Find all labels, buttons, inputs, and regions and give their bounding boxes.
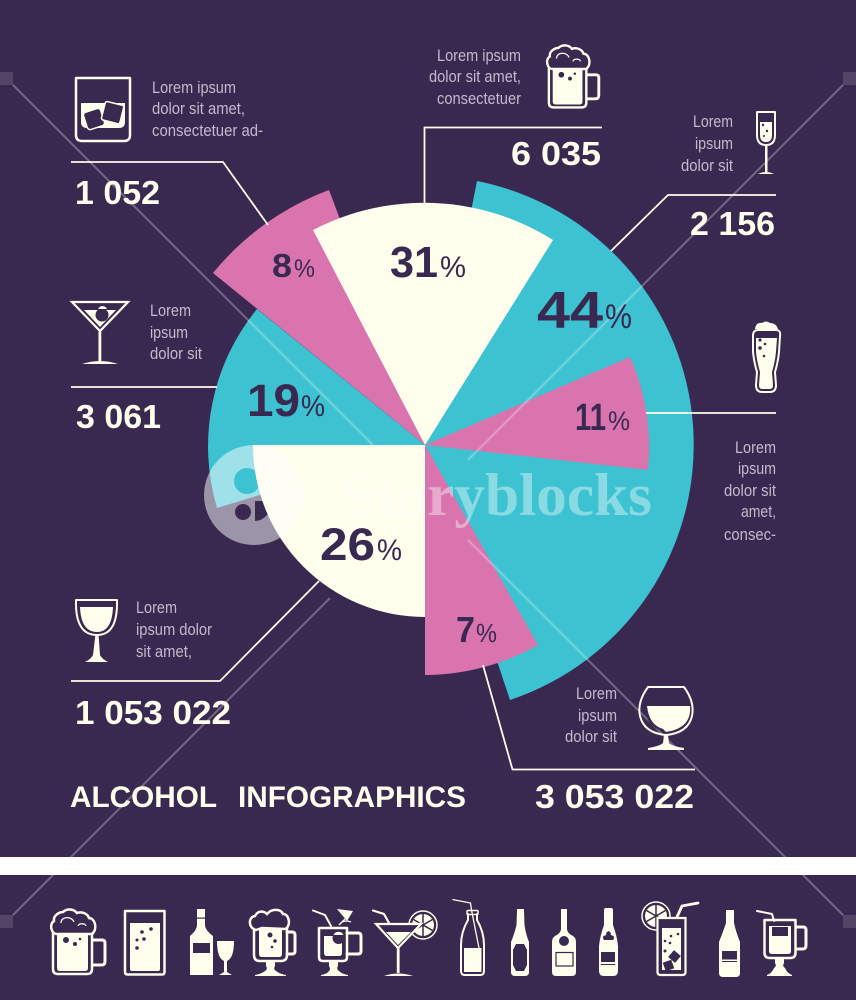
callout: champagne flute <box>611 112 776 251</box>
icon: champagne flute <box>757 112 775 174</box>
watermark: Storyblocks <box>342 462 652 528</box>
percentage label: 11%: % <box>608 406 630 436</box>
callout: wine glass <box>71 581 319 731</box>
description: dolor sit amet, <box>429 68 521 86</box>
percentage label: 8% <box>272 247 315 284</box>
percentage label: 19%: 19 <box>247 375 300 426</box>
icon row <box>51 900 806 977</box>
percentage label: 11%: 11 <box>575 397 606 439</box>
icon: whisky glass <box>76 78 130 141</box>
description: dolor sit <box>724 482 776 500</box>
description: Lorem ipsum <box>152 79 236 97</box>
leader line <box>646 412 776 414</box>
description: dolor sit <box>565 728 617 746</box>
icon: martini glass <box>72 302 128 364</box>
callout: whisky <box>71 78 268 225</box>
percentage label: 26%: % <box>377 534 402 567</box>
callout: beer glass <box>646 322 780 544</box>
percentage label: 31%: 31 <box>390 238 438 287</box>
percentage label: 44% <box>537 282 632 340</box>
percentage label: 26% <box>320 519 402 570</box>
value: 6 035 <box>511 135 601 172</box>
description: Lorem <box>136 599 177 617</box>
percentage label: 19%: % <box>301 390 325 423</box>
value: 1 052 <box>75 174 160 211</box>
description: Lorem <box>735 439 776 457</box>
icon: wine glass <box>76 600 117 662</box>
leader line <box>71 386 217 388</box>
icon: tall cocktail with lemon <box>642 902 698 975</box>
percentage label: 31% <box>390 238 466 287</box>
description: dolor sit <box>681 157 733 175</box>
description: ipsum <box>578 707 617 725</box>
description <box>150 302 202 363</box>
description: Lorem <box>576 685 617 703</box>
callout: martini <box>71 302 217 435</box>
callout: beer mug <box>424 45 602 205</box>
percentage label: 7% <box>456 609 497 650</box>
percentage label: 7%: % <box>476 618 497 648</box>
leader line <box>611 195 776 251</box>
icon: plain bottle <box>719 910 740 977</box>
icon: beer mug <box>51 909 105 974</box>
leader line <box>483 665 695 770</box>
value: 1 053 022 <box>75 694 231 731</box>
percentage label: 44%: 44 <box>537 282 603 340</box>
description: sit amet, <box>136 643 192 661</box>
value: 3 061 <box>76 398 161 435</box>
percentage label: 8%: % <box>294 255 315 283</box>
icon: liquor bottle <box>552 909 576 976</box>
icon: champagne bottle <box>599 908 618 976</box>
icon: irish coffee with straw and umbrella <box>313 909 361 976</box>
description: consec- <box>724 526 776 544</box>
percentage label: 31%: % <box>440 251 466 284</box>
title: ALCOHOL <box>70 781 217 814</box>
description: Lorem ipsum <box>437 47 521 65</box>
title: INFOGRAPHICS <box>238 781 466 814</box>
icon: beer glass <box>753 322 780 392</box>
pie chart <box>208 181 694 700</box>
icon: milk bottle with straw <box>452 900 484 975</box>
description: Lorem <box>150 302 191 320</box>
description: Lorem <box>693 113 733 131</box>
percentage label: 7%: 7 <box>456 609 475 650</box>
icon: beer mug <box>547 45 599 107</box>
icon: cocktail with lemon <box>373 910 437 976</box>
icon: tall glass <box>125 911 164 974</box>
percentage label: 44%: % <box>605 298 632 336</box>
description: dolor sit <box>150 345 202 363</box>
leader line <box>424 128 602 205</box>
percentage label: 26%: 26 <box>320 519 375 570</box>
description: amet, <box>741 503 776 521</box>
icon: mug with straw <box>757 911 806 976</box>
description <box>681 113 733 175</box>
description <box>429 47 521 108</box>
description <box>152 79 263 140</box>
percentage label: 8%: 8 <box>272 247 292 284</box>
leader line <box>71 581 319 681</box>
callout: brandy snifter <box>483 665 695 815</box>
leader line <box>71 162 268 225</box>
description: ipsum <box>150 324 188 342</box>
description: consectetuer ad- <box>152 122 263 140</box>
icon: footed beer mug <box>250 910 295 976</box>
percentage label: 19% <box>247 375 325 426</box>
value: 3 053 022 <box>535 778 694 815</box>
description: ipsum <box>738 460 776 478</box>
description <box>136 599 212 661</box>
watermark <box>204 445 652 545</box>
description: dolor sit amet, <box>152 100 245 118</box>
title <box>70 781 466 814</box>
value: 2 156 <box>690 205 775 242</box>
description: ipsum <box>695 135 733 153</box>
description: consectetuer <box>437 90 521 108</box>
description: ipsum dolor <box>136 621 212 639</box>
description <box>724 439 776 544</box>
icon: beer bottle <box>511 909 529 976</box>
white divider band <box>0 857 856 875</box>
icon: bottle and glass <box>190 909 234 975</box>
icon: brandy snifter <box>639 687 693 750</box>
description <box>565 685 617 746</box>
